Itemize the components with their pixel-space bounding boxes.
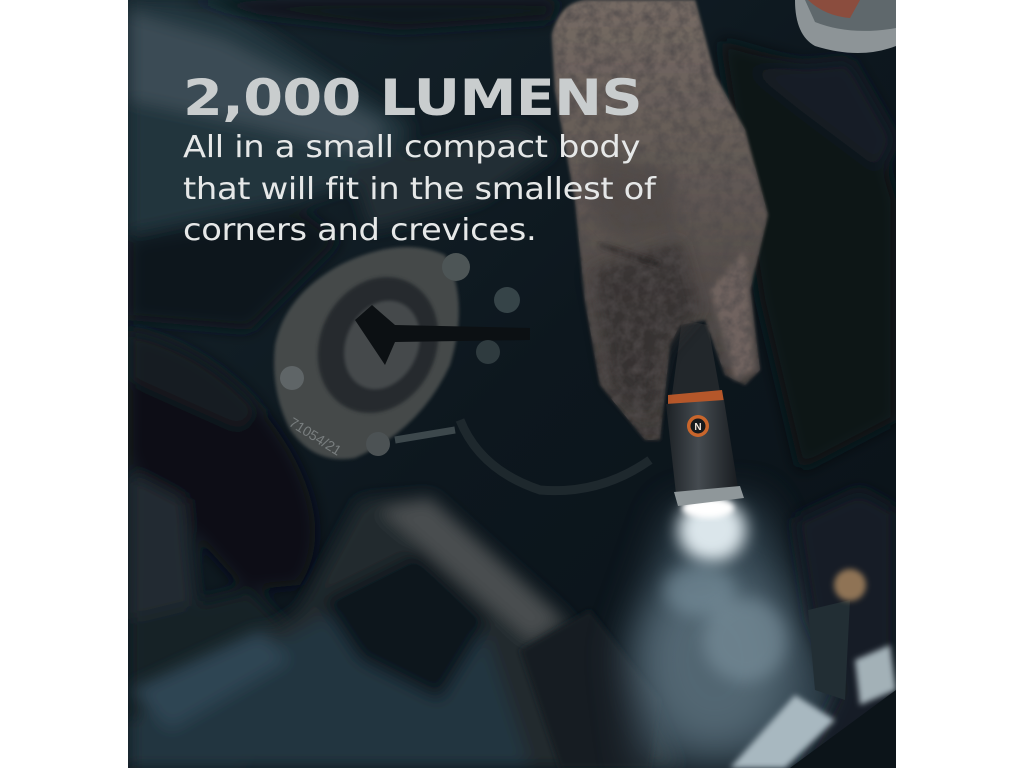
body text: All in a small compact body	[183, 130, 640, 165]
hand	[552, 0, 768, 440]
flashlight logo badge	[687, 415, 709, 437]
engine parts: thin hose	[460, 420, 650, 491]
lit parts bottom right	[730, 490, 896, 768]
strut mount plate	[274, 247, 530, 459]
engine parts: connector	[520, 610, 660, 768]
title: 2,000 LUMENS	[183, 69, 642, 127]
engine parts: left round hose	[128, 330, 315, 768]
body text: that will fit in the smallest of	[183, 172, 656, 206]
engine parts: lower intake	[130, 495, 680, 768]
flashlight logo badge: N	[694, 422, 702, 433]
engine parts: top dark shapes	[180, 0, 896, 470]
photo: mechanic holding flashlight in engine bay	[128, 0, 896, 768]
light beam glow	[625, 498, 860, 768]
body text	[183, 130, 657, 248]
radiator cap	[795, 0, 896, 53]
flashlight	[666, 320, 744, 506]
engine parts: upper left hose	[128, 0, 555, 330]
stamped part number: 71054/21	[286, 414, 345, 459]
headline and body copy	[183, 69, 657, 248]
body text: corners and crevices.	[183, 213, 536, 248]
